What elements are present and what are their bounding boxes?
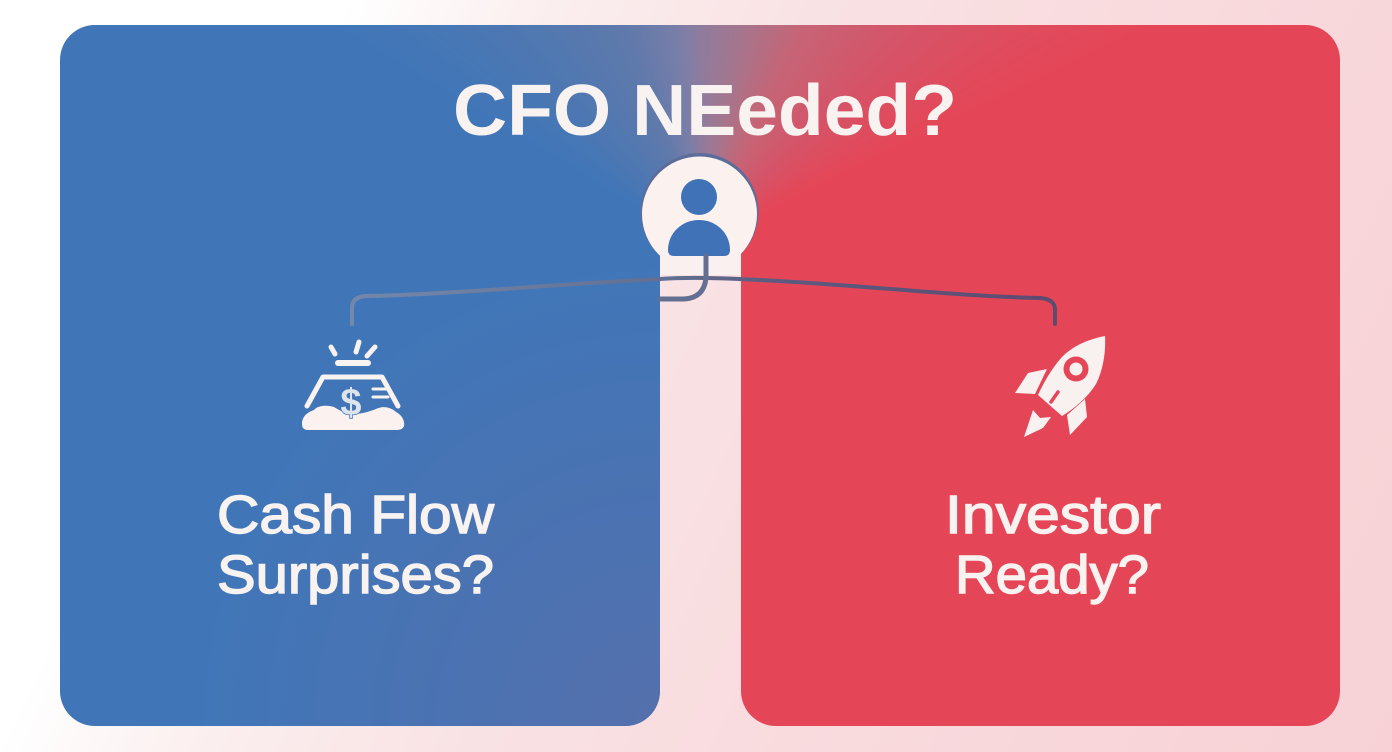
icon: money bag cash flow: $ [340,382,362,424]
label: investor ready: Investor [945,485,1161,545]
label: cash flow surprises: Cash Flow [217,485,495,545]
label: cash flow surprises [217,485,495,605]
icon: money bag cash flow [302,342,404,430]
connector lines to both options [352,256,1055,324]
title: CFO NEeded? [453,71,957,151]
label: cash flow surprises: Surprises? [217,545,494,605]
icon: person in circle [640,153,758,275]
icon: rocket [1015,336,1105,437]
label: investor ready: Ready? [955,545,1149,605]
label: investor ready [945,485,1161,605]
